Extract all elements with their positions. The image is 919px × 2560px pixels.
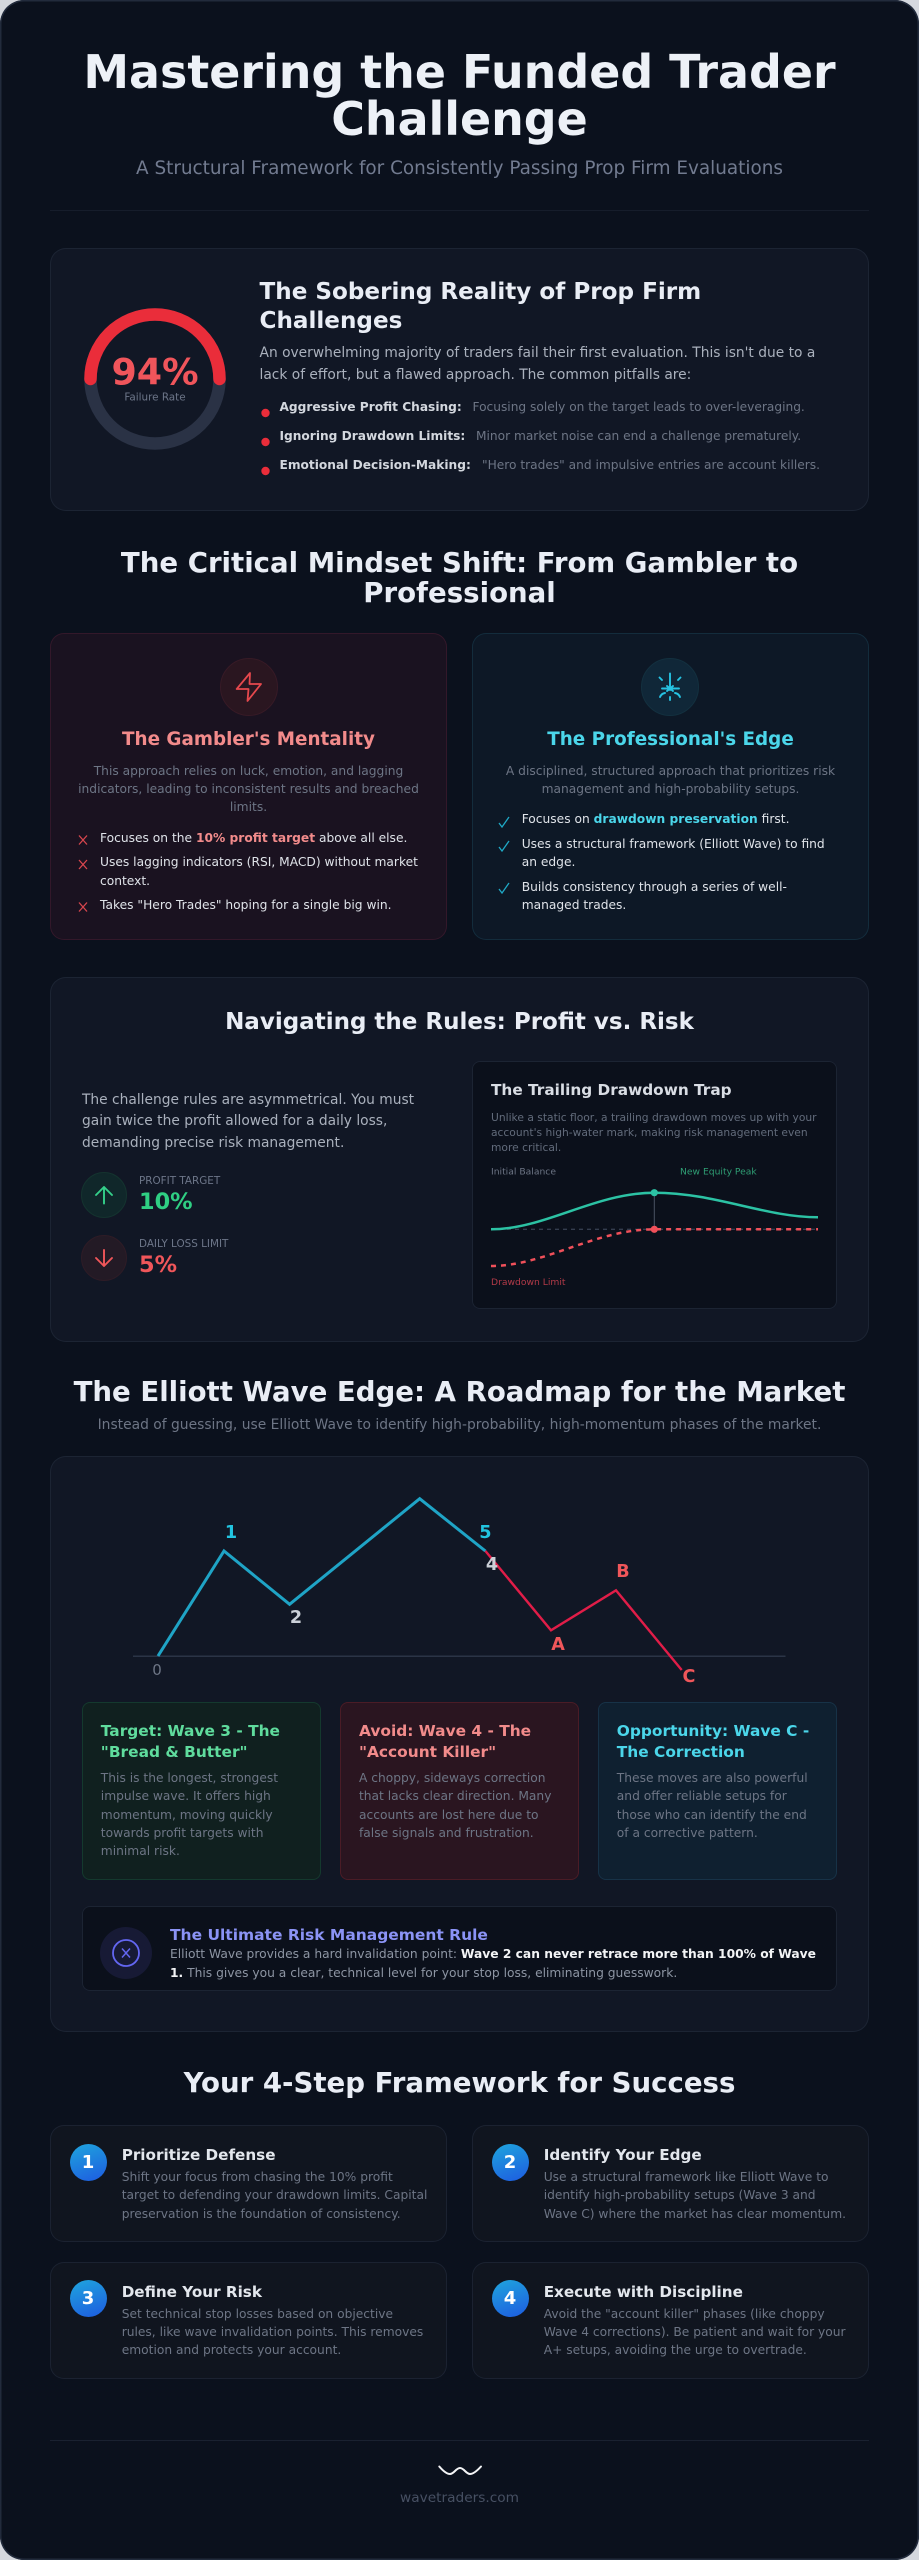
card title: Target: Wave 3 - The bbox=[101, 1722, 280, 1740]
step title: Execute with Discipline bbox=[544, 2282, 743, 2300]
list item: Focuses on the 10% profit target above all else. bbox=[100, 831, 407, 845]
heading: sobering reality: Challenges bbox=[260, 308, 402, 334]
intro paragraph: An overwhelming majority of traders fail their first evaluation. This isn't due to a bbox=[260, 345, 815, 361]
heading: elliott wave: The Elliott Wave Edge: A Roadmap for the Market bbox=[74, 1375, 845, 1408]
icon: down arrow bbox=[81, 1235, 127, 1281]
callout text: 1. This gives you a clear, technical level for your stop loss, eliminating guesswork. bbox=[170, 1966, 677, 1980]
pitfall: emotional decisions: Emotional Decision-Making: bbox=[280, 458, 471, 472]
card text: A choppy, sideways correction bbox=[359, 1771, 546, 1785]
number badge: 4 bbox=[504, 2288, 516, 2309]
list item: Builds consistency through a series of well- bbox=[522, 880, 787, 894]
description: management and high-probability setups. bbox=[542, 782, 799, 796]
footer url: wavetraders.com bbox=[400, 2490, 519, 2506]
paragraph: The challenge rules are asymmetrical. You must bbox=[82, 1092, 414, 1108]
list item: Uses lagging indicators (RSI, MACD) without market bbox=[100, 855, 418, 869]
card text bbox=[100, 1771, 278, 1858]
chart: wave diagram: 4 bbox=[486, 1555, 498, 1575]
panel: navigating the rules bbox=[50, 977, 869, 1342]
step text bbox=[544, 2170, 846, 2221]
heading: rules: Navigating the Rules: Profit vs. Risk bbox=[225, 1009, 694, 1035]
step 1 bbox=[50, 2125, 447, 2242]
trap description: account's high-water mark, making risk management even bbox=[491, 1126, 808, 1139]
callout: ultimate risk rule bbox=[82, 1906, 837, 1991]
panel title: The Gambler's Mentality bbox=[122, 729, 375, 750]
trap title: The Trailing Drawdown Trap bbox=[491, 1081, 732, 1099]
card title: Avoid: Wave 4 - The bbox=[359, 1722, 531, 1740]
step text: Wave 4 corrections). Be patient and wait for your bbox=[544, 2325, 846, 2339]
panel: gambler mentality bbox=[50, 633, 447, 940]
icons: check marks bbox=[498, 816, 510, 894]
number badge bbox=[70, 2280, 106, 2317]
panel: sobering reality bbox=[50, 248, 869, 511]
paragraph: gain twice the profit allowed for a daily loss, bbox=[82, 1113, 387, 1129]
step title: Identify Your Edge bbox=[544, 2146, 702, 2164]
card text: towards profit targets with bbox=[101, 1826, 263, 1840]
card title: The Correction bbox=[617, 1743, 745, 1761]
callout text bbox=[170, 1947, 816, 1980]
number badge: 3 bbox=[82, 2288, 94, 2309]
card: wave 4 avoid bbox=[340, 1702, 579, 1880]
stat: profit target bbox=[81, 1172, 220, 1218]
chart: wave diagram: A bbox=[551, 1635, 565, 1655]
pitfall: profit chasing: Focusing solely on the target leads to over-leveraging. bbox=[472, 400, 805, 414]
chart: failure rate gauge bbox=[84, 308, 226, 450]
card text bbox=[616, 1771, 808, 1840]
card title: "Bread & Butter" bbox=[101, 1743, 248, 1761]
card title: Opportunity: Wave C - bbox=[617, 1722, 809, 1740]
heading: sobering reality: The Sobering Reality of Prop Firm bbox=[260, 279, 701, 305]
chart: trailing drawdown: Initial Balance bbox=[491, 1166, 556, 1177]
step text: identify high-probability setups (Wave 3 and bbox=[544, 2188, 816, 2202]
step text: Use a structural framework like Elliott Wave to bbox=[544, 2170, 829, 2184]
chart: wave diagram bbox=[133, 1496, 786, 1687]
step 4 bbox=[472, 2262, 869, 2378]
value: 10% bbox=[139, 1189, 193, 1215]
icon: invalidation x bbox=[100, 1927, 152, 1979]
elliott wave subheading: Instead of guessing, use Elliott Wave to identify high-probability, high-momentum phases of the market. bbox=[98, 1417, 821, 1433]
step text: preservation is the foundation of consistency. bbox=[122, 2207, 401, 2221]
card text: These moves are also powerful bbox=[617, 1771, 808, 1785]
number badge bbox=[70, 2144, 106, 2181]
trap description bbox=[491, 1111, 817, 1154]
step text: A+ setups, avoiding the urge to overtrade. bbox=[544, 2343, 807, 2357]
list item: managed trades. bbox=[522, 898, 626, 912]
pitfall: emotional decisions bbox=[261, 458, 820, 476]
step text: Shift your focus from chasing the 10% profit bbox=[122, 2170, 393, 2184]
pitfall: profit chasing: Aggressive Profit Chasing: bbox=[280, 400, 462, 414]
pitfall: drawdown limits: Ignoring Drawdown Limits: bbox=[280, 429, 465, 443]
description bbox=[78, 764, 419, 814]
number badge bbox=[492, 2280, 528, 2317]
step text: Set technical stop losses based on objective bbox=[122, 2306, 393, 2320]
chart: wave diagram: 0 bbox=[152, 1661, 162, 1679]
card text: impulse wave. It offers high bbox=[101, 1789, 271, 1803]
number badge bbox=[492, 2144, 528, 2181]
step text bbox=[544, 2306, 846, 2357]
trap description: more critical. bbox=[491, 1141, 561, 1154]
card text: and offer reliable setups for bbox=[617, 1789, 787, 1803]
label: DAILY LOSS LIMIT bbox=[139, 1238, 228, 1250]
panel: professional edge bbox=[472, 633, 869, 940]
card text: that lacks clear direction. Many bbox=[359, 1789, 551, 1803]
list item bbox=[522, 837, 825, 869]
paragraph: demanding precise risk management. bbox=[82, 1135, 344, 1151]
description: indicators, leading to inconsistent results and breached bbox=[78, 782, 419, 796]
heading: mindset shift: The Critical Mindset Shift: From Gambler to bbox=[121, 546, 798, 578]
label: PROFIT TARGET bbox=[139, 1175, 220, 1187]
pitfall: emotional decisions: "Hero trades" and impulsive entries are account killers. bbox=[482, 458, 820, 472]
card title bbox=[616, 1722, 809, 1761]
step text bbox=[122, 2170, 427, 2221]
description: limits. bbox=[230, 800, 267, 814]
chart: failure rate gauge: Failure Rate bbox=[124, 392, 186, 404]
description bbox=[506, 764, 835, 796]
chart: wave diagram: 2 bbox=[290, 1608, 302, 1628]
trap description: Unlike a static floor, a trailing drawdown moves up with your bbox=[491, 1111, 817, 1124]
chart: trailing drawdown: New Equity Peak bbox=[680, 1166, 757, 1177]
card title: "Account Killer" bbox=[359, 1743, 496, 1761]
panel title: The Professional's Edge bbox=[547, 729, 794, 750]
description: This approach relies on luck, emotion, and lagging bbox=[94, 764, 403, 778]
step text: rules, like wave invalidation points. This removes bbox=[122, 2325, 423, 2339]
list item: Takes "Hero Trades" hoping for a single big win. bbox=[100, 898, 392, 912]
icon: up arrow bbox=[81, 1172, 127, 1218]
card text: This is the longest, strongest bbox=[101, 1771, 278, 1785]
list item bbox=[100, 855, 418, 888]
list item: context. bbox=[100, 874, 150, 888]
icon: lightning bolt bbox=[220, 658, 278, 716]
step text bbox=[122, 2306, 423, 2357]
paragraph bbox=[82, 1092, 414, 1151]
list item: Focuses on drawdown preservation first. bbox=[522, 812, 789, 826]
step text: Wave C) where the market has clear momentum. bbox=[544, 2207, 846, 2221]
chart: trailing drawdown bbox=[491, 1166, 818, 1288]
card: wave 3 target bbox=[82, 1702, 321, 1880]
step title: Define Your Risk bbox=[122, 2282, 262, 2300]
chart: wave diagram: 5 bbox=[479, 1523, 492, 1543]
list item: Uses a structural framework (Elliott Wave) to find bbox=[522, 837, 825, 851]
title: Challenge bbox=[331, 92, 588, 146]
step text: emotion and protects your account. bbox=[122, 2343, 341, 2357]
icon: burst bbox=[641, 658, 699, 716]
pitfall: drawdown limits: Minor market noise can end a challenge prematurely. bbox=[476, 429, 801, 443]
card text bbox=[359, 1771, 551, 1840]
list item: an edge. bbox=[522, 855, 575, 869]
step text: Avoid the "account killer" phases (like choppy bbox=[544, 2306, 825, 2320]
heading: mindset shift: Professional bbox=[363, 576, 556, 608]
title: Mastering the Funded Trader bbox=[83, 44, 836, 98]
pitfall: drawdown limits bbox=[261, 429, 801, 446]
callout text: Elliott Wave provides a hard invalidation point: Wave 2 can never retrace more than 100% of Wave bbox=[170, 1947, 816, 1961]
step 2 bbox=[472, 2125, 869, 2242]
chart: trailing drawdown: Drawdown Limit bbox=[491, 1277, 566, 1288]
panel: trailing drawdown trap bbox=[472, 1061, 837, 1309]
icons: cross marks bbox=[78, 835, 88, 912]
callout title: The Ultimate Risk Management Rule bbox=[170, 1926, 488, 1944]
value: 5% bbox=[139, 1252, 177, 1278]
icon: wave logo bbox=[438, 2466, 482, 2475]
chart: wave diagram: 1 bbox=[225, 1523, 237, 1543]
card title bbox=[359, 1722, 531, 1761]
card text: momentum, moving quickly bbox=[101, 1808, 273, 1822]
heading: sobering reality bbox=[260, 279, 701, 334]
card text: false signals and frustration. bbox=[359, 1826, 534, 1840]
card text: accounts are lost here due to bbox=[359, 1808, 539, 1822]
step title: Prioritize Defense bbox=[122, 2146, 276, 2164]
panel: elliott wave bbox=[50, 1456, 869, 2032]
heading: 4-step framework: Your 4-Step Framework for Success bbox=[184, 2066, 735, 2099]
card text: minimal risk. bbox=[101, 1844, 180, 1858]
stat: daily loss limit bbox=[81, 1235, 228, 1281]
pitfall: profit chasing bbox=[261, 400, 805, 418]
intro paragraph: lack of effort, but a flawed approach. The common pitfalls are: bbox=[260, 367, 691, 383]
description: A disciplined, structured approach that prioritizes risk bbox=[506, 764, 835, 778]
list item bbox=[522, 880, 787, 912]
chart: wave diagram: B bbox=[616, 1562, 630, 1582]
number badge: 1 bbox=[82, 2152, 94, 2173]
card title bbox=[100, 1722, 280, 1761]
intro paragraph bbox=[260, 345, 815, 383]
title bbox=[83, 44, 836, 146]
number badge: 2 bbox=[504, 2152, 516, 2173]
card text: those who can identify the end bbox=[617, 1808, 807, 1822]
step text: target to defending your drawdown limits. Capital bbox=[122, 2188, 427, 2202]
subtitle: A Structural Framework for Consistently Passing Prop Firm Evaluations bbox=[136, 158, 783, 178]
heading: mindset shift bbox=[121, 546, 798, 608]
card: wave c opportunity bbox=[598, 1702, 837, 1880]
card text: of a corrective pattern. bbox=[617, 1826, 758, 1840]
step 3 bbox=[50, 2262, 447, 2378]
chart: wave diagram: C bbox=[683, 1667, 695, 1687]
chart: failure rate gauge: 94% bbox=[111, 350, 199, 394]
